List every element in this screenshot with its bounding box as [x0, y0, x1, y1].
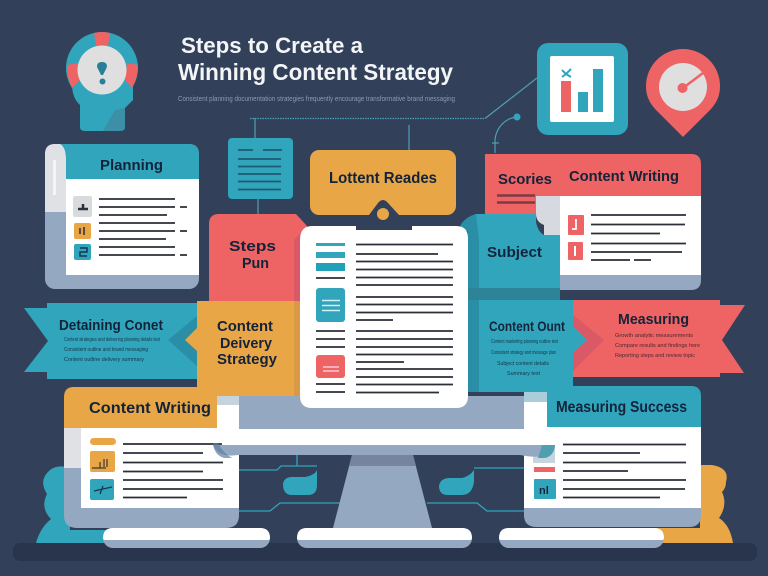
panel: teal document icon: [228, 138, 293, 199]
panel: Lottent Reades: [310, 150, 456, 215]
panel: Planning: Planning: [100, 157, 163, 174]
panel: Scories and Content Writing: [485, 154, 701, 290]
panel: Content Delivery Strategy: Strategy: [217, 351, 278, 368]
ribbon: Measuring: Growth analytic measurements: [615, 333, 694, 339]
icon: gauge pin: [646, 49, 720, 137]
panel: Scories and Content Writing: Content Writing: [569, 168, 679, 185]
floor bar: [13, 543, 757, 561]
monitor base pills: [103, 528, 664, 548]
panel: bottom Content Writing: Content Writing: [89, 400, 211, 417]
panel: Measuring Success: [524, 386, 701, 527]
monitor: [213, 392, 555, 458]
panel: Measuring Success: nl: [539, 485, 549, 497]
ribbon: Measuring: Measuring: [618, 311, 689, 328]
ribbon: Detaining Conet: Detaining Conet: [59, 318, 163, 334]
cable lines: [239, 455, 525, 511]
panel: Subject and Content Ount: Subject: [487, 245, 542, 261]
ribbon: Detaining Conet: Content strategies and delivering planning details text: [64, 337, 160, 343]
monitor stand: [333, 455, 432, 528]
panel: Content Delivery Strategy: Content: [217, 318, 273, 335]
ribbon: Measuring: [573, 300, 745, 377]
ribbon: Measuring: Reporting steps and review topic: [615, 353, 696, 359]
panel: Content Delivery Strategy: Deivery: [220, 335, 273, 352]
icon: clip on document: [356, 200, 412, 230]
ribbon: Detaining Conet: Consistent outline and brand messaging: [64, 347, 148, 353]
ribbon: Detaining Conet: Content outline delivery summary: [64, 357, 145, 363]
panel: Subject and Content Ount: Content marketing planning outline text: [491, 339, 558, 345]
connector lines: [250, 78, 537, 214]
title: Winning Content Strategy: [178, 59, 453, 85]
panel: centre document: [300, 226, 468, 408]
panel: Measuring Success: Measuring Success: [556, 399, 687, 416]
panel: Subject and Content Ount: [460, 214, 573, 392]
panel: Subject and Content Ount: Content Ount: [489, 319, 565, 334]
icon: bar chart tile: [537, 43, 628, 135]
panel: Lottent Reades: Lottent Reades: [329, 170, 437, 187]
panel: Steps Pun: Steps: [229, 238, 276, 255]
panel: Steps Pun: [209, 214, 307, 306]
panel: Scories and Content Writing: Scories: [498, 171, 552, 188]
panel: Subject and Content Ount: Summary text: [507, 371, 541, 377]
subtitle: Consistent planning documentation strategies frequently encourage transformative brand messaging: [178, 94, 455, 103]
panel: Content Delivery Strategy: [185, 301, 300, 396]
title: Steps to Create a: [181, 33, 364, 58]
panel: Subject and Content Ount: Consistent strategy and message plan: [491, 350, 556, 356]
icon: right cable blob: [439, 470, 474, 495]
panel: bottom Content Writing: [64, 387, 239, 528]
icon: head: [66, 32, 138, 131]
panel: Steps Pun: Pun: [242, 255, 269, 272]
blobs behind panels: [36, 466, 110, 543]
title: [178, 33, 453, 85]
ribbon: Measuring: Compare results and findings here: [615, 343, 700, 349]
ribbon: Detaining Conet: [24, 303, 197, 379]
icon: left cable blob: [283, 470, 317, 495]
panel: Planning: [45, 144, 199, 289]
panel: Subject and Content Ount: Subject content details: [497, 361, 550, 367]
